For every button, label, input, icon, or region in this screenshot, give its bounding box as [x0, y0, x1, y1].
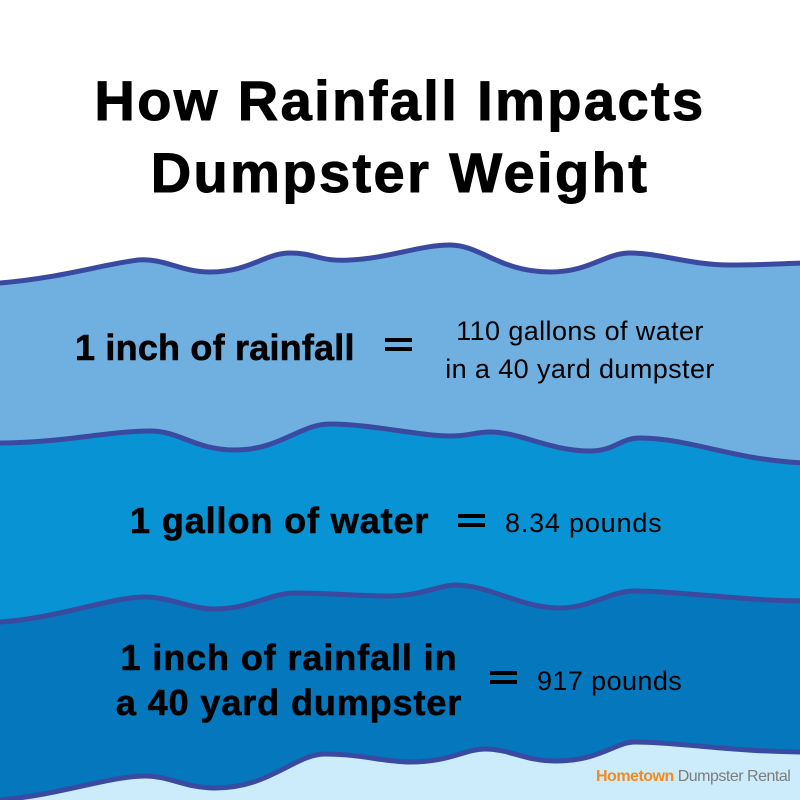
equals [385, 338, 412, 351]
value: 8.34 pounds [505, 508, 662, 538]
label: a 40 yard dumpster [116, 682, 462, 723]
equals [490, 671, 517, 684]
title: Dumpster Weight [151, 141, 649, 204]
value: in a 40 yard dumpster [445, 354, 715, 384]
row 3: total weight [116, 637, 682, 723]
label: 1 inch of rainfall [75, 327, 355, 368]
title [94, 69, 706, 204]
row 1: rainfall to gallons [75, 316, 715, 384]
label: 1 gallon of water [130, 500, 429, 541]
logo: Hometown Dumpster Rental [596, 768, 790, 785]
label: 1 inch of rainfall in [121, 637, 457, 678]
row 2: gallon weight [130, 500, 662, 541]
value: 917 pounds [537, 666, 682, 696]
value [445, 316, 715, 384]
title: How Rainfall Impacts [94, 69, 706, 132]
equals [458, 514, 485, 527]
value: 110 gallons of water [456, 316, 704, 346]
label [116, 637, 462, 723]
